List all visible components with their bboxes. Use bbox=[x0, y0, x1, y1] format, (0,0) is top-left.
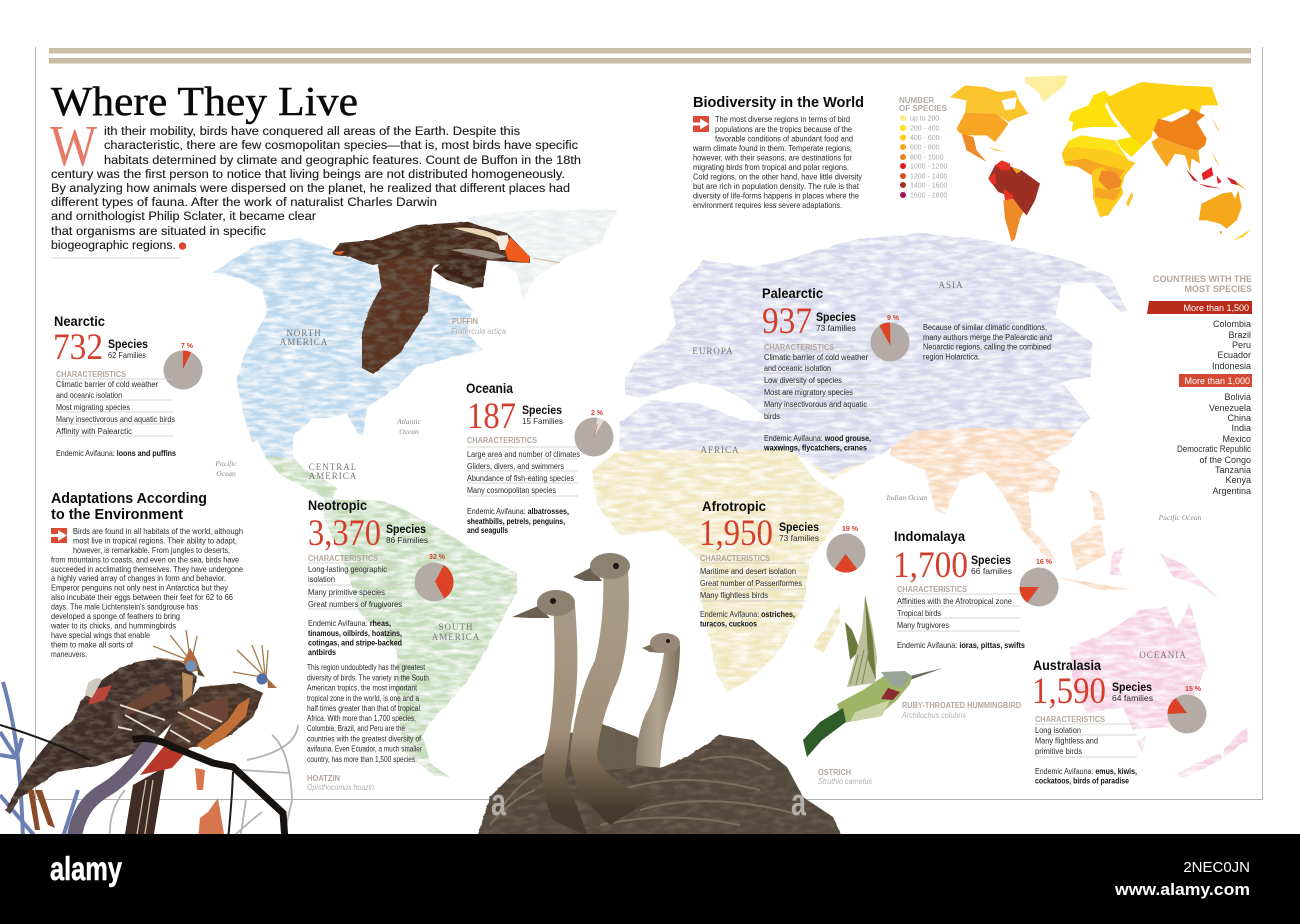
species count: 187 bbox=[467, 396, 516, 437]
caption: ostrich: Struthio camelus bbox=[818, 777, 872, 786]
continent labels: AFRICA bbox=[700, 445, 740, 455]
body text: warm climate found in them. Temperate regions, bbox=[692, 144, 852, 153]
map region: Neotropic Central and South America bbox=[265, 457, 517, 777]
neck right bbox=[636, 645, 680, 768]
body text: The most diverse regions in terms of bird bbox=[715, 115, 850, 124]
continent labels: AMERICA bbox=[280, 337, 328, 347]
pie chart 9% bbox=[870, 315, 910, 362]
purple branch bbox=[74, 740, 152, 840]
pie chart 7%: 7 % bbox=[181, 343, 194, 350]
continent labels: SOUTH bbox=[438, 622, 474, 632]
list: 1,500 bbox=[1212, 319, 1251, 371]
list: 1,000: Democratic Republic bbox=[1177, 444, 1251, 454]
icon: arrow bbox=[51, 528, 67, 543]
panel: Oceania: 15 Families bbox=[522, 416, 563, 426]
pie chart 16% bbox=[1020, 559, 1058, 606]
body text: favorable conditions of abundant food and bbox=[715, 134, 853, 144]
characteristics list bbox=[1035, 715, 1137, 757]
characteristics list: CHARACTERISTICS bbox=[467, 436, 538, 445]
list: 1,000: India bbox=[1231, 423, 1251, 433]
illustration: puffin bbox=[333, 222, 560, 374]
note on Holarctica: Neoarctic regions, calling the combined bbox=[923, 342, 1051, 352]
panel: Neotropic: 86 Families bbox=[386, 535, 428, 545]
body text: them to make all sorts of bbox=[51, 640, 134, 650]
note on Holarctica bbox=[923, 323, 1052, 362]
endemic avifauna: tinamous, oilbirds, hoatzins, bbox=[308, 629, 402, 638]
list: 1,000: China bbox=[1227, 413, 1251, 423]
panel: Indomalaya bbox=[893, 529, 1058, 650]
endemic avifauna bbox=[1035, 767, 1137, 786]
map region: Palearctic Eurasia bbox=[620, 233, 1127, 480]
caption: puffin: Fratercula artica bbox=[451, 327, 507, 336]
characteristics list: CHARACTERISTICS bbox=[764, 343, 835, 352]
bar: more than 1,000: More than 1,000 bbox=[1184, 376, 1250, 386]
legend: number of species: 800 - 1000 bbox=[910, 154, 944, 162]
list: 1,500: Colombia bbox=[1213, 319, 1251, 329]
endemic avifauna: Endemic Avifauna: loons and puffins bbox=[56, 449, 176, 458]
panel: Afrotropic bbox=[699, 499, 866, 628]
list: 1,000: Argentina bbox=[1212, 486, 1251, 496]
head right bbox=[642, 633, 680, 653]
pie chart 15% bbox=[1168, 686, 1206, 734]
pie chart 2%: 2 % bbox=[591, 410, 604, 417]
caption: ostrich: OSTRICH bbox=[818, 768, 851, 777]
characteristics list: and oceanic isolation bbox=[764, 364, 831, 373]
body text: most live in tropical regions. Their ability to adapt, bbox=[73, 536, 237, 546]
characteristics list: and oceanic isolation bbox=[56, 391, 122, 400]
map region: Indomalaya bbox=[890, 428, 1133, 590]
note on Holarctica: region Holarctica. bbox=[923, 352, 980, 362]
panel: countries with the most species: MOST SPECIES bbox=[1184, 284, 1252, 294]
intro text: different types of fauna. After the work of naturalist Charles Darwin bbox=[51, 195, 437, 209]
ocean labels: Ocean bbox=[216, 469, 236, 478]
feet bbox=[195, 768, 224, 840]
body text: avifauna. Even Ecuador, a much smaller bbox=[307, 744, 422, 754]
list: 1,000: Venezuela bbox=[1209, 403, 1251, 413]
body text bbox=[50, 527, 243, 659]
body text: diversity of life-forms happens in places where the bbox=[693, 192, 860, 200]
body text: Cold regions, on the other hand, have little diversity bbox=[693, 172, 862, 182]
characteristics list: Most are migratory species bbox=[764, 388, 853, 397]
intro text: characteristic, there are few cosmopolitan species—that is, most birds have specific bbox=[104, 138, 578, 152]
intro text: habitats determined by climate and geographic features. Count de Buffon in the 18th bbox=[104, 153, 581, 167]
tail of front bird bbox=[124, 767, 165, 840]
characteristics list: isolation bbox=[308, 575, 335, 584]
bar: more than 1,500: More than 1,500 bbox=[1183, 303, 1249, 313]
rear bird bbox=[5, 659, 197, 814]
pie chart 9%: 9 % bbox=[887, 315, 900, 322]
panel: Adaptations According to the Environment bbox=[50, 490, 243, 659]
intro text: biogeographic regions. bbox=[51, 238, 176, 252]
panel: countries with the most species: COUNTRIES WITH THE bbox=[1153, 274, 1252, 284]
watermark marks bbox=[491, 782, 807, 824]
caption: hoatzin: HOATZIN bbox=[307, 774, 340, 783]
characteristics list: Gliders, divers, and swimmers bbox=[467, 462, 564, 471]
panel: Indomalaya: Species bbox=[971, 553, 1011, 567]
characteristics list: Many frugivores bbox=[897, 621, 949, 630]
legend: number of species bbox=[899, 96, 948, 200]
icon: arrow bbox=[693, 116, 709, 132]
intro text bbox=[50, 113, 581, 252]
characteristics list: Many flightless birds bbox=[700, 591, 768, 600]
characteristics list: CHARACTERISTICS bbox=[897, 585, 968, 594]
body text: Colombia, Brazil, and Peru are the bbox=[307, 724, 405, 733]
species count: 1,950 bbox=[699, 513, 773, 554]
endemic avifauna: cotingas, and stripe-backed bbox=[308, 638, 402, 648]
characteristics list: CHARACTERISTICS bbox=[56, 370, 127, 379]
legend: number of species: 1000 - 1200 bbox=[910, 164, 947, 170]
continent labels: OCEANIA bbox=[1139, 650, 1187, 660]
panel: Neotropic: Neotropic bbox=[308, 498, 367, 513]
panel: Palearctic: 73 families bbox=[816, 323, 856, 333]
bar: more than 1,000 bbox=[1179, 374, 1252, 387]
characteristics list bbox=[764, 343, 882, 421]
main body bbox=[473, 735, 848, 850]
body text: countries with the greatest diversity of bbox=[307, 734, 422, 744]
heading: Biodiversity in the World bbox=[693, 94, 864, 111]
characteristics list: Abundance of fish-eating species bbox=[467, 474, 574, 483]
body text: Emperor penguins not only nest in Antarctica but they bbox=[51, 584, 228, 592]
endemic avifauna bbox=[467, 507, 569, 535]
title: Where They Live bbox=[51, 78, 358, 124]
panel: Australasia: 64 families bbox=[1112, 693, 1153, 703]
endemic avifauna: Endemic Avifauna: wood grouse, bbox=[764, 434, 871, 443]
panel: countries with the most species bbox=[1147, 274, 1252, 496]
characteristics list: Long-lasting geographic bbox=[308, 565, 387, 574]
body text: Africa. With more than 1,700 species, bbox=[307, 714, 416, 723]
body text: populations are the tropics because of the bbox=[715, 125, 853, 134]
illustration: hoatzins on a branch bbox=[0, 630, 298, 840]
body text: This region undoubtedly has the greatest bbox=[307, 663, 426, 672]
intro text: and ornithologist Philip Sclater, it became clear bbox=[51, 209, 316, 223]
panel: Nearctic: 62 Families bbox=[108, 350, 146, 360]
note on Holarctica: many authors merge the Palearctic and bbox=[923, 333, 1052, 342]
characteristics list: Many flightless and bbox=[1035, 736, 1098, 746]
characteristics list bbox=[56, 370, 175, 436]
feather strokes bbox=[490, 757, 800, 825]
intro text: that organisms are situated in specific bbox=[51, 224, 266, 238]
pie chart 19%: 19 % bbox=[842, 526, 859, 533]
illustration: ostriches bbox=[473, 553, 848, 850]
list: 1,000: Mexico bbox=[1222, 434, 1251, 444]
caption: puffin bbox=[451, 317, 507, 336]
endemic avifauna: Endemic Avifauna: ioras, pittas, swifts bbox=[897, 641, 1025, 650]
endemic avifauna: Endemic Avifauna: albatrosses, bbox=[467, 507, 569, 516]
panel: Oceania: Species bbox=[522, 403, 562, 417]
characteristics list: Climatic barrier of cold weather bbox=[56, 380, 158, 389]
characteristics list: CHARACTERISTICS bbox=[1035, 715, 1106, 724]
list: 1,500: Ecuador bbox=[1217, 350, 1251, 360]
characteristics list: primitive birds bbox=[1035, 747, 1082, 756]
head left bbox=[512, 590, 575, 618]
endemic avifauna: Endemic Avifauna: emus, kiwis, bbox=[1035, 767, 1137, 776]
body text: but are rich in population density. The rule is that bbox=[693, 182, 860, 191]
list: 1,000: Bolivia bbox=[1224, 392, 1251, 402]
characteristics list: CHARACTERISTICS bbox=[700, 554, 771, 563]
body text: however, with their seasons, are destinations for bbox=[693, 154, 852, 162]
body text: water to its chicks, and hummingbirds bbox=[50, 622, 176, 630]
endemic avifauna bbox=[308, 619, 402, 657]
characteristics list: Affinities with the Afrotropical zone bbox=[897, 597, 1013, 606]
footer logo: alamy bbox=[50, 850, 122, 887]
body text: diversity of birds. The variety in the South bbox=[307, 674, 429, 682]
panel: Australasia bbox=[1032, 658, 1206, 786]
continent labels: AMERICA bbox=[432, 632, 480, 642]
ocean labels: Pacific bbox=[214, 459, 237, 468]
body text: from mountains to coasts, and even on the sea, birds have bbox=[51, 556, 239, 564]
legend: number of species: 1600 - 1800 bbox=[910, 192, 947, 200]
caption: puffin: PUFFIN bbox=[452, 317, 478, 326]
blue sticks bbox=[0, 682, 78, 840]
body text: American tropics, the most important bbox=[307, 684, 418, 692]
pie chart 32%: 32 % bbox=[429, 554, 446, 561]
drop cap: W bbox=[50, 113, 97, 178]
characteristics list: Large area and number of climates bbox=[467, 450, 580, 459]
species count: 3,370 bbox=[308, 513, 381, 554]
list: 1,000 bbox=[1177, 392, 1251, 496]
panel: Oceania: Oceania bbox=[466, 381, 513, 396]
endemic avifauna: Endemic Avifauna: rheas, bbox=[308, 619, 391, 628]
ocean labels: Indian Ocean bbox=[885, 493, 928, 502]
body text: days. The male Lichtenstein's sandgrouse has bbox=[51, 602, 198, 612]
body text: however, is remarkable. From jungles to deserts, bbox=[73, 546, 230, 555]
pie chart 15%: 15 % bbox=[1185, 686, 1202, 693]
body text bbox=[692, 115, 862, 210]
note on Holarctica: Because of similar climatic conditions, bbox=[923, 323, 1047, 332]
panel: Adaptations According to the Environment: to the Environment bbox=[51, 506, 183, 523]
endemic avifauna: waxwings, flycatchers, cranes bbox=[763, 444, 867, 452]
panel: Indomalaya: 66 families bbox=[971, 566, 1012, 576]
characteristics list: Great numbers of frugivores bbox=[308, 600, 402, 609]
footer image id: 2NEC0JN bbox=[1183, 859, 1250, 876]
characteristics list bbox=[308, 554, 402, 609]
characteristics list: Tropical birds bbox=[897, 609, 941, 618]
panel: Palearctic bbox=[762, 286, 1052, 452]
map region: Australasia bbox=[1070, 548, 1248, 778]
continent labels: EUROPA bbox=[692, 346, 734, 356]
body text: a highly varied array of changes in form and behavior. bbox=[51, 574, 226, 583]
characteristics list: Many cosmopolitan species bbox=[467, 486, 556, 495]
pie chart 2% bbox=[574, 410, 614, 456]
list: 1,500: Brazil bbox=[1228, 330, 1251, 340]
pie chart 7% bbox=[164, 343, 202, 390]
panel: biodiversity in the world bbox=[692, 75, 1252, 242]
characteristics list: Most migrating species bbox=[56, 403, 130, 412]
characteristics list bbox=[897, 585, 1020, 631]
endemic avifauna: turacos, cuckoos bbox=[700, 620, 757, 628]
caption: hoatzin: Opisthocomus hoazin bbox=[307, 783, 374, 792]
ocean labels bbox=[214, 417, 1202, 522]
panel: Adaptations According to the Environment: Adaptations According bbox=[51, 490, 207, 507]
panel: Afrotropic: Species bbox=[779, 520, 819, 534]
species count: 937 bbox=[762, 301, 812, 342]
biogeographic world map bbox=[213, 210, 1248, 778]
footer band bbox=[0, 834, 1300, 924]
choropleth world map bbox=[950, 75, 1252, 242]
intro text: century was the first person to notice that living beings are not distributed homogeneously. bbox=[51, 167, 565, 181]
body text: migrating birds from tropical and polar regions. bbox=[693, 163, 849, 172]
front bird bbox=[140, 742, 195, 775]
panel: Afrotropic: Afrotropic bbox=[702, 499, 766, 514]
species count: 1,700 bbox=[893, 545, 968, 586]
list: 1,000: Tanzania bbox=[1215, 465, 1251, 475]
characteristics list: CHARACTERISTICS bbox=[308, 554, 379, 563]
ocean labels: Atlantic bbox=[396, 417, 422, 426]
continent labels bbox=[280, 280, 1187, 660]
watermark marks: a bbox=[791, 782, 807, 824]
species count: 1,590 bbox=[1032, 671, 1106, 712]
endemic avifauna bbox=[763, 434, 871, 452]
body text: country, has more than 1,500 species. bbox=[307, 755, 417, 764]
panel: Oceania bbox=[466, 381, 614, 535]
characteristics list: Many insectivorous and aquatic birds bbox=[56, 415, 175, 424]
characteristics list: Many insectivorous and aquatic bbox=[764, 400, 867, 409]
legend: number of species: 1200 - 1400 bbox=[910, 174, 947, 180]
caption: hummingbird bbox=[901, 701, 1021, 720]
list: 1,000: of the Congo bbox=[1199, 455, 1251, 465]
caption: hummingbird: Archilochus colubris bbox=[901, 711, 966, 720]
map region: Nearctic North America bbox=[213, 238, 483, 460]
bar: more than 1,500 bbox=[1147, 301, 1252, 314]
map region: Afrotropic Africa bbox=[592, 450, 866, 692]
characteristics list: birds bbox=[764, 412, 780, 421]
body text: Birds are found in all habitats of the world, although bbox=[73, 527, 243, 536]
panel: Indomalaya: Indomalaya bbox=[894, 529, 965, 544]
body text bbox=[307, 663, 429, 764]
body text: developed a sponge of feathers to bring bbox=[51, 612, 180, 621]
body text: environment requires less severe adaptations. bbox=[693, 201, 842, 210]
panel: Australasia: Species bbox=[1112, 680, 1152, 694]
top double bar bbox=[49, 48, 1251, 64]
caption: hoatzin bbox=[307, 774, 374, 792]
body text: tropical zone in the world, is one and a bbox=[307, 694, 419, 703]
endemic avifauna: and seagulls bbox=[467, 526, 508, 535]
continent labels: ASIA bbox=[938, 280, 964, 290]
body text: maneuvers. bbox=[51, 650, 87, 659]
footer site: www.alamy.com bbox=[1114, 880, 1250, 899]
characteristics list: Low diversity of species bbox=[764, 376, 842, 385]
legend: number of species: 200 - 400 bbox=[910, 126, 940, 132]
characteristics list: Great number of Passeriformes bbox=[700, 579, 802, 588]
legend: number of species: 600 - 800 bbox=[910, 144, 940, 152]
panel: Nearctic bbox=[53, 314, 202, 458]
pie chart 32% bbox=[414, 554, 454, 602]
panel: Neotropic: Species bbox=[386, 522, 426, 536]
characteristics list: Climatic barrier of cold weather bbox=[764, 353, 868, 362]
caption: ostrich bbox=[818, 768, 872, 786]
endemic avifauna: antbirds bbox=[308, 648, 336, 657]
illustration: hummingbird bbox=[803, 595, 943, 757]
panel: Palearctic: Palearctic bbox=[762, 286, 823, 301]
legend: number of species: 400 - 600 bbox=[910, 135, 940, 142]
legend: number of species: OF SPECIES bbox=[899, 104, 948, 113]
body text: also incubate their eggs between their feet for 62 to 66 bbox=[51, 593, 234, 602]
characteristics list bbox=[700, 554, 806, 601]
head center bbox=[573, 553, 630, 581]
panel: Neotropic bbox=[307, 498, 454, 792]
continent labels: AMERICA bbox=[309, 471, 357, 481]
legend: number of species: up to 200 bbox=[910, 116, 939, 122]
intro text: By analyzing how animals were dispersed on the planet, he realized that different places had bbox=[51, 181, 570, 195]
pie chart 19% bbox=[826, 526, 866, 573]
pie chart 16%: 16 % bbox=[1036, 559, 1053, 566]
panel: Afrotropic: 73 families bbox=[779, 533, 819, 543]
panel: Nearctic: Species bbox=[108, 337, 148, 351]
rear body bbox=[560, 723, 660, 800]
endemic avifauna bbox=[700, 610, 795, 628]
species count: 732 bbox=[53, 327, 103, 368]
legend: number of species: NUMBER bbox=[899, 96, 934, 105]
panel: Australasia: Australasia bbox=[1033, 658, 1101, 673]
continent labels: CENTRAL bbox=[309, 462, 357, 472]
endemic avifauna: cockatoos, birds of paradise bbox=[1035, 776, 1129, 786]
neck left bbox=[542, 605, 588, 836]
body text: succeeded in acclimating themselves. They have undergone bbox=[51, 565, 243, 574]
watermark marks: a bbox=[491, 782, 507, 824]
continent labels: NORTH bbox=[286, 328, 322, 338]
intro text: ith their mobility, birds have conquered all areas of the Earth. Despite this bbox=[104, 124, 520, 138]
panel: Nearctic: Nearctic bbox=[54, 314, 105, 329]
characteristics list bbox=[467, 436, 580, 496]
ocean labels: Pacific Ocean bbox=[1158, 513, 1202, 522]
characteristics list: Many primitive species bbox=[308, 588, 385, 597]
caption: hummingbird: RUBY-THROATED HUMMINGBIRD bbox=[902, 701, 1021, 710]
characteristics list: Maritime and desert isolation bbox=[700, 567, 796, 576]
neck center bbox=[570, 570, 650, 825]
characteristics list: Affinity with Palearctic bbox=[56, 427, 132, 436]
panel: Palearctic: Species bbox=[816, 310, 856, 324]
body text: half times greater than that of tropical bbox=[307, 704, 420, 713]
ocean labels: Ocean bbox=[399, 427, 419, 436]
endemic avifauna: Endemic Avifauna: ostriches, bbox=[700, 610, 795, 619]
endemic avifauna: sheathbills, petrels, penguins, bbox=[467, 517, 565, 526]
list: 1,500: Peru bbox=[1232, 340, 1251, 350]
body text: have special wings that enable bbox=[51, 631, 150, 640]
characteristics list: Long isolation bbox=[1035, 726, 1081, 735]
legend: number of species: 1400 - 1600 bbox=[910, 182, 947, 190]
page frame bbox=[36, 47, 1262, 800]
list: 1,000: Kenya bbox=[1225, 475, 1251, 485]
list: 1,500: Indonesia bbox=[1212, 361, 1251, 371]
map region: Greenland bbox=[467, 210, 617, 300]
black branch bbox=[133, 739, 285, 840]
